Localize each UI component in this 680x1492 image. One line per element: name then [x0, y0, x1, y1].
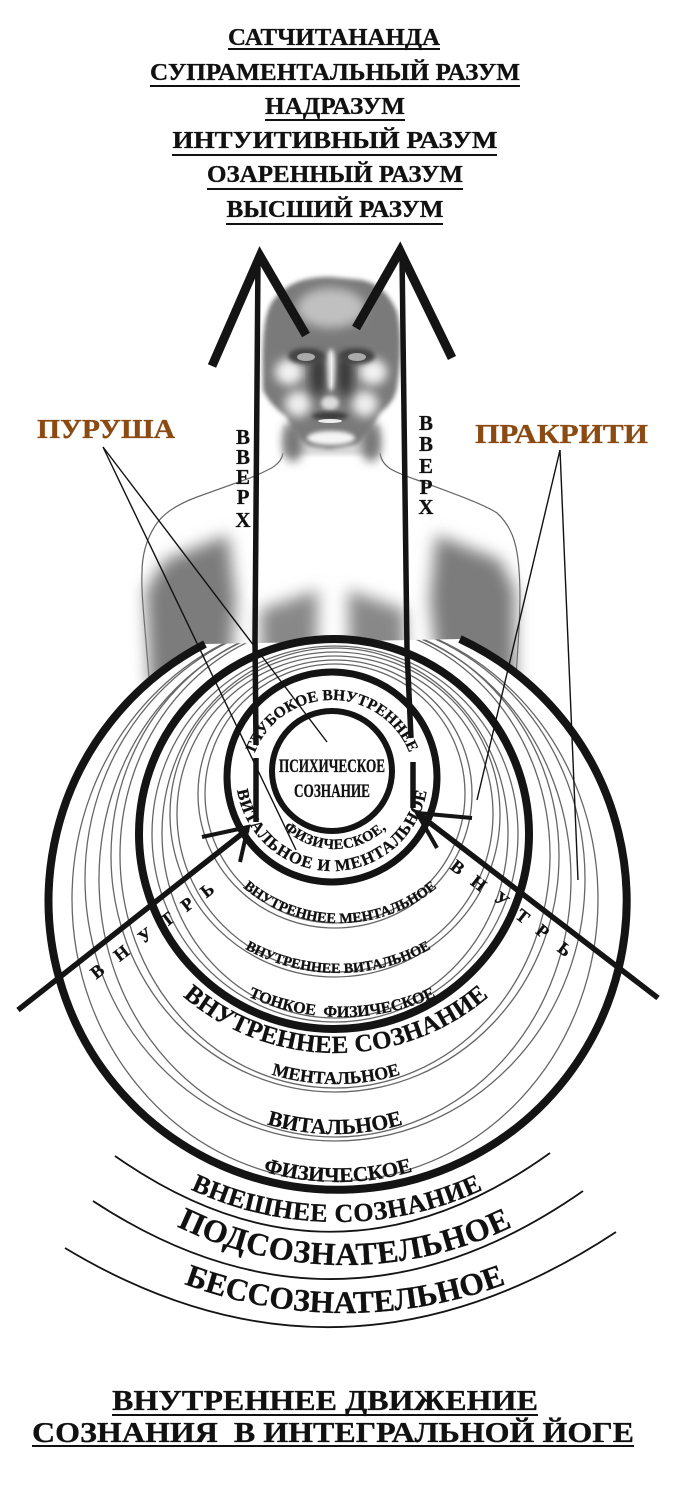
vertical label: up, left: Е: [236, 465, 250, 489]
deep inner ring: [227, 672, 437, 882]
label: inward, left: Н: [110, 941, 133, 965]
label: inward, right: Р: [532, 920, 553, 943]
vertical label: up, right: Е: [419, 454, 433, 478]
outer consciousness thick arc: [49, 639, 627, 1190]
torso outline: [142, 453, 520, 690]
curved ring labels: ВНУТРЕННЕЕ ВИТАЛЬНОЕ: [245, 940, 430, 974]
bottom title: СОЗНАНИЯ В ИНТЕГРАЛЬНОЙ ЙОГЕ: [32, 1418, 634, 1449]
label: inward, right: Ь: [554, 938, 576, 961]
neck shading: [283, 422, 381, 462]
heading: higher planes of consciousness: ИНТУИТИВНЫЙ РАЗУМ: [172, 128, 498, 154]
core label: psychic consciousness: СОЗНАНИЕ: [294, 781, 370, 802]
vertical label: up, right: Х: [418, 495, 434, 519]
core label: psychic consciousness: [279, 756, 385, 802]
curved ring labels: ГЛУБОКОЕ ВНУТРЕННЕЕ: [245, 690, 418, 753]
head: [263, 277, 400, 449]
vertical label: up, left: Р: [237, 485, 250, 509]
inner consciousness thick ring: [139, 639, 529, 1029]
curved ring labels: ВНЕШНЕЕ СОЗНАНИЕ: [190, 1174, 482, 1222]
label: inward, left: [86, 879, 218, 983]
core label: psychic consciousness: ПСИХИЧЕСКОЕ: [279, 756, 385, 777]
arrow: upward left: [212, 256, 306, 822]
vertical label: up, right: [418, 411, 434, 519]
vertical label: up, right: В: [419, 411, 433, 435]
concentric consciousness rings: [49, 617, 627, 1190]
vertical label: up, left: В: [236, 445, 250, 469]
curved ring labels: ФИЗИЧЕСКОЕ,: [286, 823, 386, 850]
heading: higher planes of consciousness: СУПРАМЕНТАЛЬНЫЙ РАЗУМ: [150, 60, 520, 86]
label: inward, right: Т: [512, 905, 534, 928]
thin rings of the inner zone: [152, 646, 518, 1022]
arrow: inward right: [417, 813, 658, 998]
label: inward, right: [447, 856, 576, 961]
curved ring labels: [177, 690, 511, 1314]
heading: higher planes of consciousness: ОЗАРЕННЫЙ РАЗУМ: [207, 162, 463, 188]
bottom title: [32, 1386, 634, 1449]
label: inward, left: Т: [156, 908, 178, 931]
heading: higher planes of consciousness: ВЫСШИЙ РАЗУМ: [226, 197, 444, 223]
shoulder shading: [146, 535, 515, 690]
curved ring labels: ВИТАЛЬНОЕ И МЕНТАЛЬНОЕ: [236, 788, 427, 872]
arrow: inward left: [18, 827, 248, 1010]
side label: Prakriti: ПРАКРИТИ: [475, 419, 648, 449]
curved ring labels: ТОНКОЕ ФИЗИЧЕСКОЕ: [250, 986, 435, 1018]
label: inward, right: Н: [467, 871, 490, 895]
vertical label: up, left: [235, 425, 251, 532]
heading: higher planes of consciousness: САТЧИТАНАНДА: [228, 25, 441, 51]
label: inward, left: Р: [177, 893, 198, 916]
label: inward, left: В: [86, 960, 108, 983]
arrow: upward right: [356, 251, 452, 808]
pointer lines from Purusha: [103, 447, 327, 850]
vertical label: up, left: В: [236, 425, 250, 449]
label: inward, right: В: [447, 856, 469, 879]
curved ring labels: ВНУТРЕННЕЕ МЕНТАЛЬНОЕ: [243, 880, 436, 924]
heading: higher planes of consciousness: НАДРАЗУМ: [265, 94, 405, 120]
curved ring labels: ФИЗИЧЕСКОЕ: [265, 1158, 412, 1182]
label: inward, right: У: [490, 887, 513, 911]
thin rings of the outer zone: [72, 617, 598, 1181]
psychic core ring: [272, 711, 392, 831]
curved ring labels: МЕНТАЛЬНОЕ: [272, 1063, 400, 1084]
vertical label: up, right: Р: [420, 475, 433, 499]
vertical label: up, right: В: [419, 432, 433, 456]
curved ring labels: ВИТАЛЬНОЕ: [267, 1110, 402, 1134]
curved ring labels: БЕССОЗНАТЕЛЬНОЕ: [184, 1264, 504, 1314]
side label: Purusha: ПУРУША: [37, 414, 176, 444]
lower arcs: [65, 1153, 616, 1327]
label: inward, left: У: [134, 923, 157, 947]
curved ring labels: ВНУТРЕННЕЕ СОЗНАНИЕ: [182, 984, 488, 1054]
label: inward, left: Ь: [196, 879, 218, 902]
heading: higher planes of consciousness: [150, 25, 520, 224]
illustration: human torso and head: [142, 277, 520, 690]
face shading: [275, 288, 387, 445]
bottom title: ВНУТРЕННЕЕ ДВИЖЕНИЕ: [112, 1386, 538, 1417]
curved ring labels: ПОДСОЗНАТЕЛЬНОЕ: [177, 1207, 511, 1266]
vertical label: up, left: Х: [235, 508, 251, 532]
pointer lines from Prakriti: [477, 450, 578, 880]
